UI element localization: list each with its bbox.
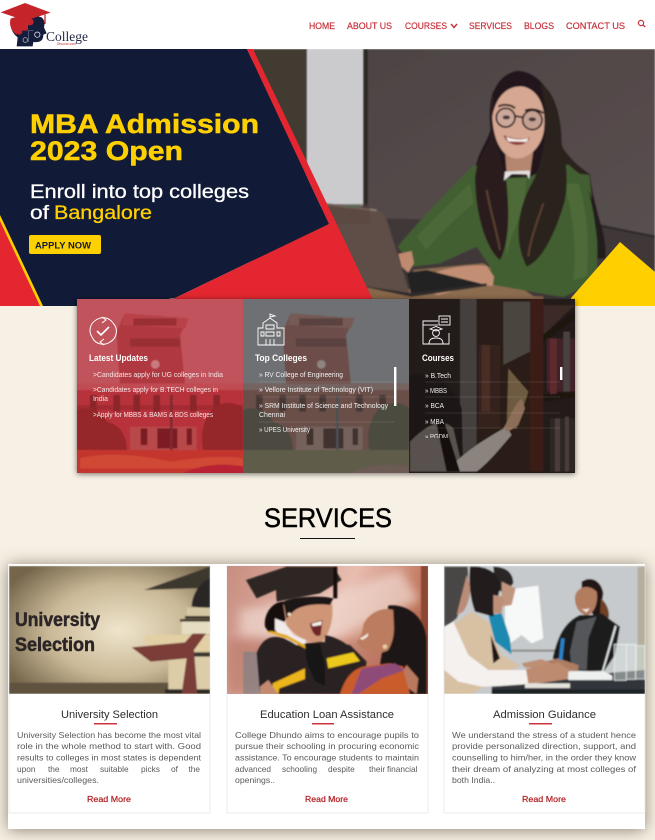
card body text: assistance. To encourage students to maintain xyxy=(235,752,419,762)
scrollbar xyxy=(394,367,396,406)
top colleges content: » Vellore Institute of Technology (VIT) xyxy=(259,387,373,394)
hero photo: student with laptop xyxy=(253,49,655,310)
table and papers xyxy=(492,670,645,694)
read more link: Read More xyxy=(87,794,131,804)
card body text: advanced xyxy=(235,764,271,774)
icon: college building xyxy=(258,314,284,345)
logo: Dhundo.com xyxy=(57,42,76,46)
latest updates content: >Candidates apply for UG colleges in India xyxy=(93,372,223,379)
read more link: Read More xyxy=(522,794,566,804)
top colleges content xyxy=(255,314,396,434)
mother xyxy=(325,605,427,694)
card body text: their xyxy=(369,764,385,774)
top colleges content: » SRM Institute of Science and Technology xyxy=(259,403,388,410)
scrollbar xyxy=(560,367,562,380)
navigation menu xyxy=(309,20,645,31)
hero banner xyxy=(0,49,655,310)
icon: online course xyxy=(423,316,450,344)
title underline xyxy=(312,723,334,724)
card body text: provide personalized direction, support, and xyxy=(452,741,636,751)
navigation menu: SERVICES xyxy=(469,21,512,31)
hair front xyxy=(475,90,508,260)
hero subheading: Enroll into top colleges xyxy=(30,181,249,203)
logo xyxy=(1,3,88,46)
courses content: » MBBS xyxy=(425,388,447,395)
hands xyxy=(398,251,414,273)
photo caption: University xyxy=(15,609,100,631)
card: university selection xyxy=(9,566,210,813)
card body text: most xyxy=(70,764,89,774)
courses content: » B.Tech xyxy=(425,373,451,380)
photo: interview meeting xyxy=(444,566,645,694)
navigation menu: HOME xyxy=(309,21,335,31)
photo caption xyxy=(15,612,100,652)
red diagonal shapes xyxy=(172,49,372,299)
card body text: University Selection has become the most vital xyxy=(17,730,201,740)
card body text xyxy=(452,730,637,785)
card body text: their dream of analyzing at most colleges of xyxy=(452,764,637,774)
info panel with three columns xyxy=(77,298,575,475)
courses content: Courses xyxy=(422,353,454,363)
top colleges content: » UPES University xyxy=(259,427,310,434)
hero subheading xyxy=(30,181,249,224)
woman in teal xyxy=(493,567,513,593)
navigation menu: BLOGS xyxy=(524,21,554,31)
apply now button xyxy=(29,235,101,254)
card body text: upon xyxy=(17,764,36,774)
apply now button: APPLY NOW xyxy=(35,240,91,252)
card title: Admission Guidance xyxy=(493,709,596,721)
card: admission guidance xyxy=(444,566,645,813)
services panel xyxy=(8,564,645,829)
yellow corner shape xyxy=(571,242,655,306)
card body text: counselling to him/her, in the order they know xyxy=(452,752,637,762)
card body text: schooling xyxy=(282,764,317,774)
card title: Education Loan Assistance xyxy=(260,709,394,721)
hero heading: MBA Admission xyxy=(30,109,259,139)
navy angled panel xyxy=(0,49,329,306)
title underline xyxy=(529,723,552,724)
header bar xyxy=(0,0,655,49)
top colleges content: Top Colleges xyxy=(255,353,307,363)
card body text: universities/colleges. xyxy=(17,775,99,785)
courses content: » MBA xyxy=(425,419,444,426)
card title: University Selection xyxy=(61,709,158,721)
card body text: role in the whole method to start with. Good xyxy=(17,741,201,751)
photo: cap and scroll on books xyxy=(9,566,210,694)
card: education loan assistance xyxy=(227,566,428,813)
left red triangle xyxy=(0,215,43,306)
card body text: suitable xyxy=(100,764,129,774)
top colleges content: » RV College of Engineering xyxy=(259,372,343,379)
navigation menu: CONTACT US xyxy=(566,21,625,31)
card body text: picks xyxy=(141,764,160,774)
green sweater xyxy=(398,163,598,297)
title underline xyxy=(94,723,117,724)
interviewer xyxy=(582,579,609,618)
courses content: » BCA xyxy=(425,403,444,410)
courses content: » PGDM xyxy=(425,434,448,441)
latest updates content: India xyxy=(93,396,108,403)
card body text: of xyxy=(171,764,179,774)
near woman xyxy=(444,567,468,628)
photo: graduate and mother xyxy=(227,566,428,694)
latest updates content: Latest Updates xyxy=(89,353,148,363)
glasses xyxy=(496,108,515,127)
column: latest updates xyxy=(77,299,243,475)
top colleges content: Chennai xyxy=(259,412,285,419)
latest updates content: >Candidates apply for B.TECH colleges in xyxy=(93,387,218,394)
card body text: pursue their schooling in procuring economic xyxy=(235,741,419,751)
photo caption: Selection xyxy=(15,634,95,656)
hero heading: 2023 Open xyxy=(30,136,183,166)
hero subheading: Bangalore xyxy=(54,202,152,224)
logo: College xyxy=(46,30,88,45)
card body text: We understand the stress of a student hence xyxy=(452,730,636,740)
card body text: financial xyxy=(387,764,418,774)
courses content xyxy=(422,316,562,441)
card body text xyxy=(17,730,202,785)
navigation menu: ABOUT US xyxy=(347,21,392,31)
card body text: despite xyxy=(328,764,355,774)
column: top colleges xyxy=(243,299,409,475)
column: courses xyxy=(409,298,575,473)
woman in beige xyxy=(469,566,500,617)
face and neck xyxy=(505,150,533,175)
card body text: the xyxy=(48,764,60,774)
card body text: the xyxy=(188,764,200,774)
hair back xyxy=(475,71,605,263)
hero subheading: of xyxy=(30,202,50,224)
card body text: both India.. xyxy=(452,775,495,785)
hero heading xyxy=(30,109,259,166)
latest updates content: >Apply for MBBS & BAMS & BDS colleges xyxy=(93,412,213,419)
latest updates content xyxy=(89,317,223,419)
read more link: Read More xyxy=(305,794,348,804)
navigation menu: COURSES xyxy=(405,21,447,31)
card body text: College Dhundo aims to encourage pupils to xyxy=(235,730,419,740)
icon: refresh with check xyxy=(90,317,116,345)
services heading: SERVICES xyxy=(264,503,392,533)
card body text: results to colleges in most states is dependent xyxy=(17,752,202,762)
card body text xyxy=(235,730,419,785)
card body text: openings.. xyxy=(235,775,275,785)
laptop xyxy=(407,270,487,297)
